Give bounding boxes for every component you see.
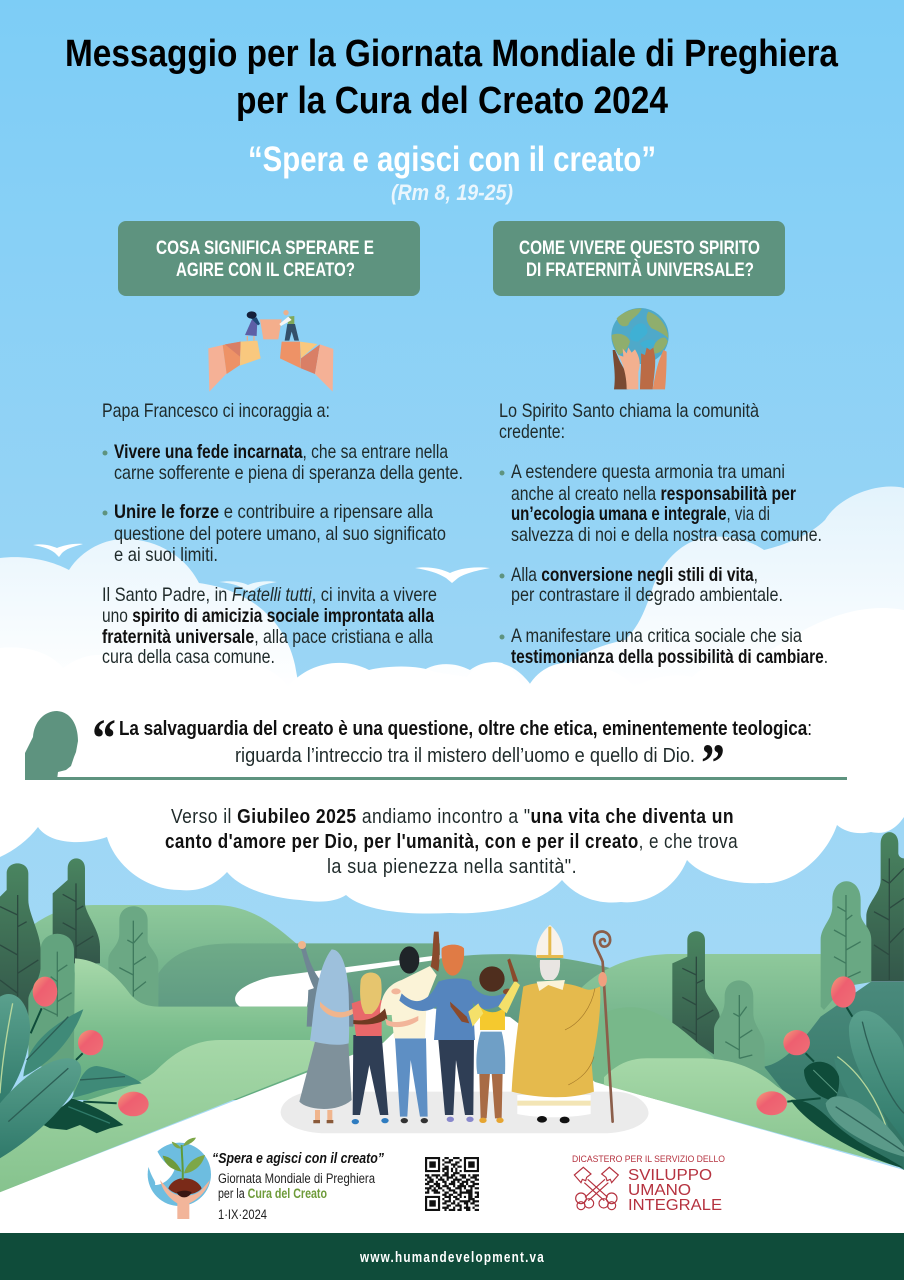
bird faint [219, 581, 277, 592]
panel: right column text: A manifestare una critica sociale che sia [511, 625, 802, 647]
left light hill [0, 1040, 348, 1192]
ground shadow [281, 1092, 648, 1133]
panel: right column text: un’ecologia umana e integrale, via di [511, 503, 770, 525]
heading box: left question: AGIRE CON IL CREATO? [176, 259, 355, 281]
white road and ground [0, 1007, 904, 1233]
panel: right column text: salvezza di noi e della nostra casa comune. [511, 524, 822, 546]
logo: Spera e agisci: per la Cura del Creato [218, 1186, 327, 1201]
main title [65, 33, 839, 122]
footer band: www.humandevelopment.va [359, 1250, 545, 1266]
panel: right column text: testimonianza della possibilità di cambiare. [511, 646, 828, 668]
panel: left column text: carne sofferente e piena di speranza della gente. [114, 462, 463, 484]
person in cream sweater [353, 932, 440, 1123]
panel: right column text: A estendere questa armonia tra umani [511, 461, 785, 483]
background clouds [0, 487, 904, 720]
far central hill [430, 954, 610, 1040]
main title: per la Cura del Creato 2024 [236, 80, 668, 122]
foreground cloud [0, 608, 904, 914]
logo emblem [147, 1138, 211, 1219]
quote: ” [701, 733, 725, 793]
text block: Giubileo 2025: canto d'amore per Dio, per l'umanità, con e per il creato, e che trova [165, 831, 738, 853]
panel: right column text: per contrastare il degrado ambientale. [511, 584, 783, 606]
quote: riguarda l’intreccio tra il mistero dell’uomo e quello di Dio. [235, 744, 695, 767]
panel: right column text: Lo Spirito Santo chiama la comunità [499, 400, 759, 422]
QR code [425, 1158, 479, 1210]
pope [512, 925, 613, 1123]
logo: Dicastero: INTEGRALE [628, 1197, 722, 1214]
text block: Giubileo 2025 [165, 806, 738, 878]
icon: people building a bridge [208, 310, 333, 392]
dicastero text: DICASTERO PER IL SERVIZIO DELLO [572, 1154, 725, 1165]
subtitle [248, 140, 656, 205]
plants left [0, 994, 142, 1158]
panel: left column text: Papa Francesco ci incoraggia a: [102, 400, 330, 422]
subtitle: (Rm 8, 19-25) [391, 180, 513, 205]
heading box: right question [493, 221, 785, 296]
logo: Spera e agisci: Giornata Mondiale di Preghiera [218, 1171, 375, 1186]
panel: left column text: fraternità universale, alla pace cristiana e alla [102, 626, 433, 648]
heading box: left question [118, 221, 420, 296]
icon: globe held by hands [611, 308, 669, 389]
panel: left column text: e ai suoi limiti. [114, 544, 218, 566]
footer band [0, 1233, 904, 1280]
person in yellow top [450, 958, 520, 1123]
text block: Giubileo 2025: Verso il Giubileo 2025 andiamo incontro a "una vita che diventa un [171, 806, 734, 828]
text block: Giubileo 2025: la sua pienezza nella santità". [327, 856, 577, 878]
bird centre [415, 567, 490, 583]
logo: Dicastero: SVILUPPO [628, 1167, 712, 1184]
nun [298, 941, 354, 1123]
quote [92, 708, 812, 793]
logo text: “Spera e agisci con il creato” [212, 1150, 384, 1167]
icon: head silhouette [25, 711, 78, 780]
panel: left column text: cura della casa comune. [102, 646, 275, 668]
panel: right column text: credente: [499, 421, 565, 443]
panel: left column text: Vivere una fede incarnata, che sa entrare nella [114, 441, 448, 463]
person in blue sweater [391, 945, 512, 1122]
bird left [33, 544, 83, 557]
heading box: right question: COME VIVERE QUESTO SPIRITO [519, 237, 760, 259]
logo: Spera e agisci [147, 1138, 384, 1222]
tulips left [33, 977, 149, 1116]
landscape left: hills and trees [0, 858, 440, 1100]
panel: right column text: anche al creato nella responsabilità per [511, 483, 796, 505]
quote: “ [92, 708, 116, 768]
panel: right column text: Alla conversione negli stili di vita, [511, 564, 758, 586]
right light hill [604, 1058, 904, 1168]
landscape right: back hills and trees [571, 832, 904, 1170]
panel: left column text: Il Santo Padre, in Fratelli tutti, ci invita a vivere [102, 584, 437, 606]
plants right [787, 1007, 904, 1168]
quote rule [25, 777, 847, 780]
panel: left column text [102, 400, 463, 668]
heading box: left question: COSA SIGNIFICA SPERARE E [156, 237, 374, 259]
blond person [352, 972, 389, 1124]
panel: left column text: Unire le forze e contribuire a ripensare alla [114, 501, 433, 523]
people group [281, 925, 648, 1133]
keys [574, 1167, 618, 1210]
logo: Dicastero [572, 1154, 725, 1214]
heading box: right question: DI FRATERNITÀ UNIVERSALE? [526, 258, 754, 281]
logo: Dicastero: UMANO [628, 1182, 691, 1199]
panel: left column text: questione del potere umano, al suo significato [114, 523, 446, 545]
subtitle: “Spera e agisci con il creato” [248, 140, 656, 179]
panel: right column text [499, 400, 828, 668]
logo: Spera e agisci: 1·IX·2024 [218, 1207, 267, 1222]
panel: left column text: uno spirito di amicizia sociale improntata alla [102, 605, 434, 627]
tulips right [756, 976, 856, 1115]
